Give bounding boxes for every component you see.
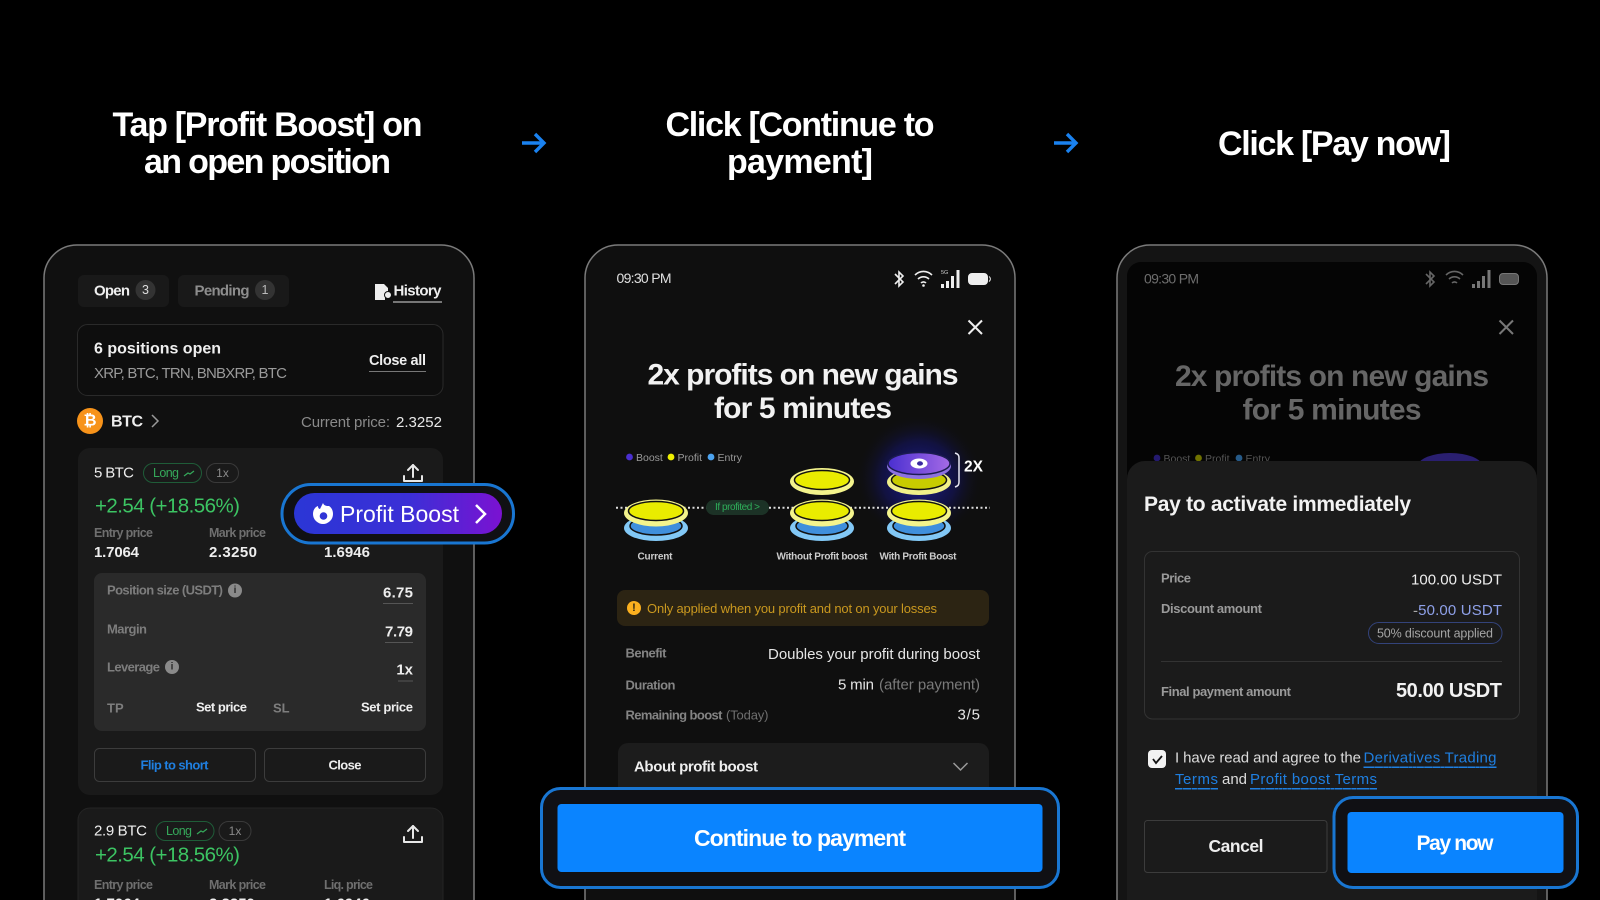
panel: phone 3 payment sheet xyxy=(1117,245,1547,900)
button: close xyxy=(264,748,426,782)
status bar: 09:30 PM xyxy=(616,270,672,286)
title: step 3: Click [Pay now] xyxy=(1218,125,1451,163)
arrow: step 1 to step 2 xyxy=(522,134,544,152)
tab: pending: 1 xyxy=(262,283,269,297)
chart: profit boost coins: With Profit Boost xyxy=(880,552,957,562)
button: continue to payment xyxy=(558,804,1042,872)
tab: open xyxy=(78,275,169,307)
title: step 2: Click [Continue to xyxy=(666,106,934,144)
panel: phone 2 profit boost details xyxy=(585,245,1015,900)
panel: position details: Leverage xyxy=(107,660,160,674)
panel: phone 3 payment sheet: 09:30 PM xyxy=(1144,270,1199,286)
heading: BTC price: 2.3252 xyxy=(396,414,442,431)
panel: position details: Set price xyxy=(196,700,247,714)
price summary: Price xyxy=(1161,570,1191,586)
price summary: -50.00 USDT xyxy=(1413,602,1502,619)
panel: position card 2.9 BTC xyxy=(78,808,443,900)
accordion: about profit boost xyxy=(618,743,989,800)
panel: payment sheet xyxy=(1127,461,1537,900)
panel: position details xyxy=(94,573,426,731)
chart: profit boost coins: Without Profit boost xyxy=(776,552,868,562)
status bar: 5G xyxy=(941,270,948,276)
dimmed heading xyxy=(1175,360,1489,426)
panel: position card 2.9 BTC: 1x xyxy=(229,824,241,838)
panel: position card 5 BTC xyxy=(78,448,443,795)
coin stack: current xyxy=(624,500,688,541)
title: step 2 xyxy=(666,106,934,181)
panel: position card 2.9 BTC: 2.9 BTC xyxy=(94,822,147,840)
price summary: Final payment amount xyxy=(1161,684,1292,699)
panel: position details: 6.75 xyxy=(383,584,413,602)
heading: offer xyxy=(648,358,958,425)
price summary xyxy=(1144,552,1520,719)
price summary: Discount amount xyxy=(1161,601,1263,616)
tab: pending: Pending xyxy=(194,282,250,300)
heading: BTC price: Current price: xyxy=(301,414,390,431)
legend: Entry xyxy=(718,452,743,464)
details: benefit rows: Doubles your profit during boost xyxy=(768,646,981,663)
panel: positions summary xyxy=(78,324,443,396)
link: history: History xyxy=(394,282,442,300)
legend: Boost xyxy=(636,452,663,464)
bracket: 2X: 2X xyxy=(964,458,984,476)
panel: position details: TP xyxy=(107,700,124,716)
badge: if profited: If profited > xyxy=(715,502,760,513)
panel: position details: Set price xyxy=(361,700,413,714)
details: benefit rows: Remaining boost xyxy=(626,708,723,722)
title: step 2: payment] xyxy=(727,143,873,181)
icon: close xyxy=(968,320,982,334)
title: step 1 xyxy=(112,106,422,181)
dimmed heading: 2x profits on new gains xyxy=(1175,360,1489,393)
icon: flame xyxy=(313,503,333,524)
panel: position card 5 BTC: 1.7064 xyxy=(94,544,140,561)
coin stack: without boost xyxy=(790,468,854,541)
heading: offer: 2x profits on new gains xyxy=(648,358,958,392)
icon: bitcoin: ₿ xyxy=(83,412,97,430)
panel: position details: i xyxy=(234,585,237,596)
arrow: step 2 to step 3 xyxy=(1054,134,1076,152)
panel: position card 5 BTC: 2.3250 xyxy=(209,544,257,561)
callout: continue to payment xyxy=(542,788,1058,888)
button: pay now xyxy=(1348,812,1564,873)
panel: phone 1 open positions xyxy=(44,245,474,900)
panel: position details: 7.79 xyxy=(385,624,413,640)
notice: warning: ! xyxy=(632,602,636,614)
legend xyxy=(626,452,743,464)
badge: if profited xyxy=(706,500,769,515)
dimmed legend: Profit xyxy=(1205,453,1230,465)
icon: share xyxy=(404,465,422,481)
heading: BTC price xyxy=(111,414,442,431)
icon: bitcoin xyxy=(77,408,103,434)
button: continue to payment: Continue to payment xyxy=(694,825,906,851)
panel: position details: i xyxy=(171,662,174,672)
link: history xyxy=(375,282,442,302)
callout: profit boost xyxy=(282,484,514,543)
price summary: 50.00 USDT xyxy=(1396,680,1502,702)
title: step 1: an open position xyxy=(144,143,391,181)
price summary: 100.00 USDT xyxy=(1411,572,1502,588)
panel: position details: Position size (USDT) xyxy=(107,582,223,598)
dimmed status bar xyxy=(1426,270,1518,288)
panel: position card 5 BTC: +2.54 (+18.56%) xyxy=(95,494,240,518)
details: benefit rows: Benefit xyxy=(626,646,667,660)
chart: profit boost coins xyxy=(616,416,990,562)
notice: warning xyxy=(617,590,989,626)
panel: position card 5 BTC: 5 BTC xyxy=(94,464,134,482)
panel: position card 5 BTC: 1.6946 xyxy=(324,544,370,561)
coin stack: with boost xyxy=(887,452,951,541)
accordion: about profit boost: About profit boost xyxy=(634,758,758,776)
panel: position card 2.9 BTC: +2.54 (+18.56%) xyxy=(95,844,240,866)
badge: leverage: 1x xyxy=(216,466,229,480)
badge: long xyxy=(144,464,202,482)
panel: position card 2.9 BTC: Mark price xyxy=(209,878,266,892)
callout: profit boost: Profit Boost xyxy=(340,501,460,527)
agreement text: Derivatives Trading xyxy=(1364,750,1496,766)
tab: open: Open xyxy=(94,282,130,300)
details: benefit rows: 5 min xyxy=(838,676,874,694)
bracket: 2X xyxy=(955,453,984,487)
panel: positions summary: 6 positions open xyxy=(94,340,221,358)
icon: dim close xyxy=(1500,320,1513,334)
callout: pay now xyxy=(1334,798,1578,888)
agreement text: and xyxy=(1222,771,1247,788)
panel: position card 2.9 BTC: Entry price xyxy=(94,878,153,892)
chart: profit boost coins: Current xyxy=(638,552,673,562)
details: benefit rows: Duration xyxy=(626,678,676,692)
panel: payment sheet: Pay to activate immediately xyxy=(1144,493,1411,516)
dimmed heading: for 5 minutes xyxy=(1242,394,1422,426)
panel: position details: SL xyxy=(273,700,290,716)
panel: position details: Margin xyxy=(107,622,147,636)
button: cancel xyxy=(1144,820,1327,872)
details: benefit rows: 3/5 xyxy=(958,706,980,724)
panel: position card 5 BTC: Entry price xyxy=(94,526,153,540)
button: close: Close xyxy=(328,758,362,772)
button: pay now: Pay now xyxy=(1416,832,1494,855)
tab: pending xyxy=(178,275,289,307)
dimmed legend xyxy=(1154,453,1482,479)
details: benefit rows xyxy=(626,646,981,724)
badge: long: Long xyxy=(153,466,179,480)
status bar xyxy=(616,270,990,288)
details: benefit rows: (Today) xyxy=(726,708,768,722)
button: cancel: Cancel xyxy=(1208,836,1264,856)
notice: warning: Only applied when you profit and not on your losses xyxy=(647,601,938,616)
legend: Profit xyxy=(678,452,702,464)
panel: position details: 1x xyxy=(396,662,414,678)
panel: position card 2.9 BTC: Long xyxy=(166,824,192,838)
panel: positions summary: XRP, BTC, TRN, BNBXRP, BTC xyxy=(94,365,287,382)
price summary: 50% discount applied xyxy=(1377,626,1493,640)
badge: leverage xyxy=(206,464,238,482)
button: flip to short xyxy=(94,748,256,782)
panel: positions summary: Close all xyxy=(369,353,426,369)
heading: BTC price: BTC xyxy=(111,414,143,430)
title: step 1: Tap [Profit Boost] on xyxy=(112,106,422,144)
button: flip to short: Flip to short xyxy=(140,758,209,772)
panel: position card 5 BTC: Mark price xyxy=(209,526,266,540)
panel: position card 2.9 BTC: Liq. price xyxy=(324,878,373,892)
agreement text: Terms xyxy=(1175,771,1218,788)
agreement text: I have read and agree to the xyxy=(1175,750,1361,766)
agreement text xyxy=(1175,750,1496,788)
checkbox: agree xyxy=(1148,750,1166,768)
agreement text: Profit boost Terms xyxy=(1250,771,1377,788)
heading: offer: for 5 minutes xyxy=(714,392,892,425)
dimmed legend: Boost xyxy=(1164,453,1190,465)
tab: open: 3 xyxy=(142,283,149,297)
details: benefit rows: (after payment) xyxy=(879,676,980,694)
dimmed legend: Entry xyxy=(1246,453,1271,465)
